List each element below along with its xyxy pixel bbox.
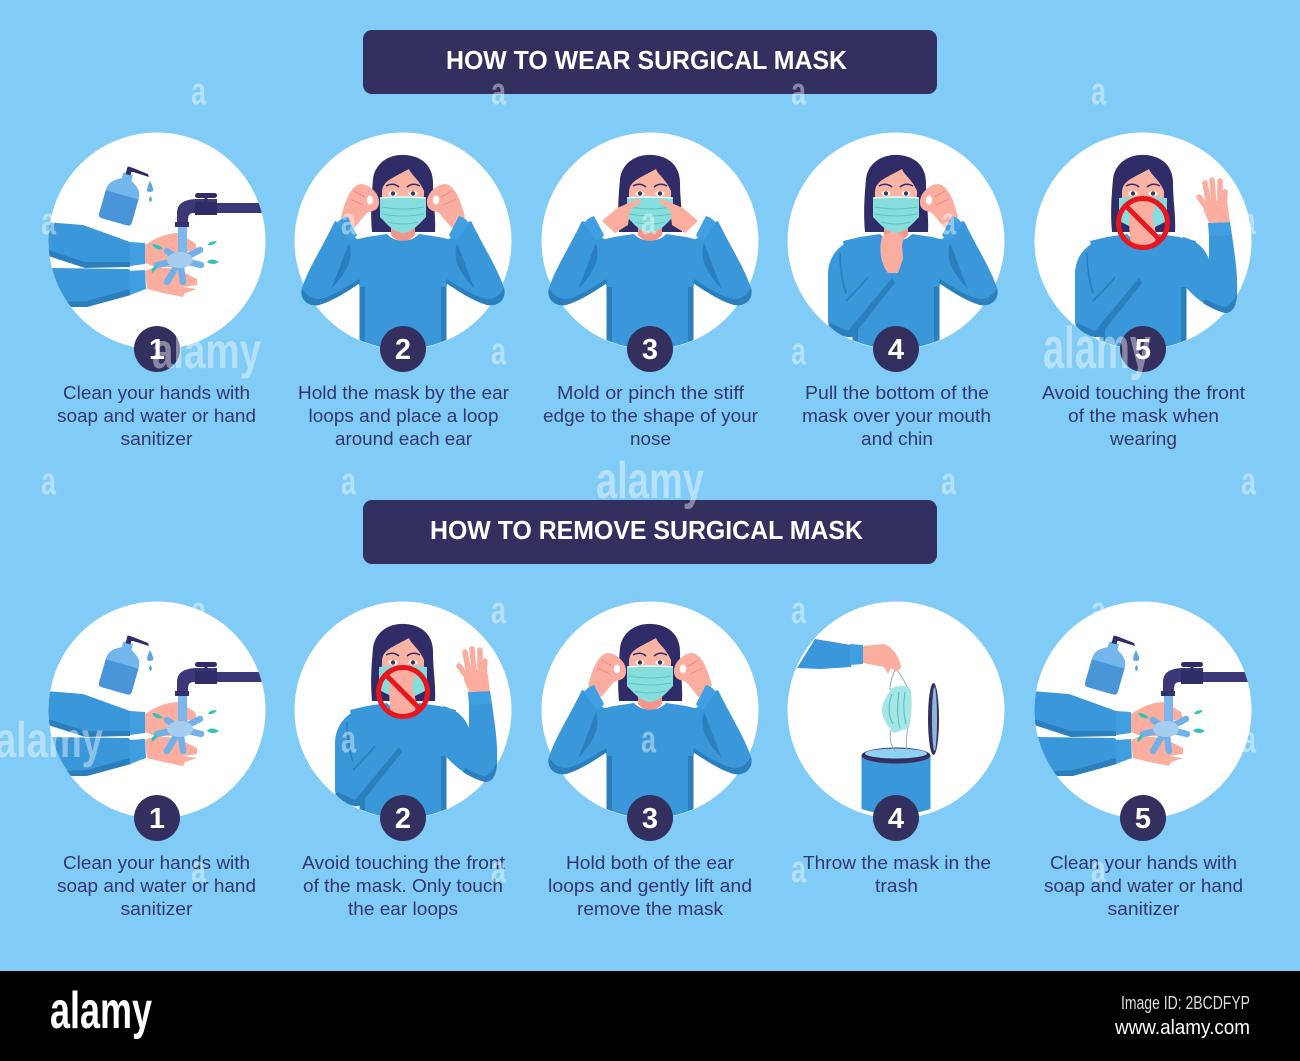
- watermarks: a: [1241, 461, 1257, 503]
- captions row 1: Hold the mask by the ear: [298, 383, 509, 403]
- captions row 1: Clean your hands with: [63, 383, 250, 403]
- watermarks: a: [941, 201, 957, 243]
- heading: how to wear: [363, 30, 937, 94]
- captions row 2: Clean your hands with: [1050, 853, 1237, 873]
- step 4 wear: pull mask: [788, 132, 1004, 350]
- watermarks: a: [491, 331, 507, 373]
- watermarks: a: [341, 201, 357, 243]
- captions row 1: wearing: [1109, 429, 1177, 449]
- captions row 1: Avoid touching the front: [1042, 383, 1245, 403]
- captions row 2: sanitizer: [1108, 899, 1180, 919]
- captions row 1: soap and water or hand: [57, 406, 256, 426]
- watermarks: [0, 71, 1257, 891]
- heading: how to remove: [363, 500, 937, 564]
- watermarks: a: [491, 590, 507, 632]
- number badges row 1: 5: [1135, 334, 1151, 366]
- watermarks: a: [1241, 719, 1257, 761]
- watermarks: alamy: [596, 452, 704, 510]
- captions row 1: loops and place a loop: [308, 406, 498, 426]
- captions row 2: trash: [875, 876, 918, 896]
- captions row 1: of the mask when: [1068, 406, 1219, 426]
- step 4 remove: throw in trash: [788, 602, 1004, 818]
- watermarks: a: [641, 201, 657, 243]
- number badges row 2: [134, 795, 1166, 841]
- watermarks: alamy: [1043, 316, 1151, 381]
- footer image id: Image ID: 2BCDFYP: [1121, 993, 1250, 1013]
- captions row 2: the ear loops: [348, 899, 458, 919]
- number badges row 1: 1: [149, 334, 165, 366]
- watermarks: a: [191, 71, 207, 113]
- captions row 1: edge to the shape of your: [543, 406, 758, 426]
- footer bar: [0, 971, 1300, 1061]
- watermarks: a: [941, 461, 957, 503]
- step 1 remove: wash hands: [45, 602, 266, 818]
- watermarks: a: [791, 849, 807, 891]
- watermarks: a: [491, 849, 507, 891]
- watermarks: a: [1241, 201, 1257, 243]
- watermarks: a: [791, 71, 807, 113]
- step 1 wear: wash hands: [45, 132, 266, 350]
- watermarks: a: [491, 71, 507, 113]
- step 2 remove: do not touch: [294, 602, 512, 818]
- number badges row 2: 3: [642, 803, 658, 835]
- number badges row 2: 2: [395, 803, 411, 835]
- captions row 2: remove the mask: [577, 899, 724, 919]
- captions row 2: soap and water or hand: [57, 876, 256, 896]
- step 2 wear: place loops: [294, 132, 512, 350]
- captions row 2: soap and water or hand: [1044, 876, 1243, 896]
- watermarks: a: [791, 590, 807, 632]
- number badges row 1: 4: [888, 334, 904, 366]
- captions row 1: Mold or pinch the stiff: [557, 383, 745, 403]
- captions row 1: and chin: [861, 429, 933, 449]
- watermarks: a: [641, 719, 657, 761]
- step 5 wear: do not touch: [1034, 132, 1252, 350]
- arm and hand: [797, 639, 901, 674]
- captions row 1: mask over your mouth: [802, 406, 991, 426]
- footer logo: alamy: [50, 982, 152, 1040]
- captions row 1: around each ear: [335, 429, 472, 449]
- watermarks: alamy: [152, 323, 261, 379]
- captions row 1: [57, 383, 1245, 449]
- number badges row 2: 5: [1135, 803, 1151, 835]
- watermarks: a: [41, 461, 57, 503]
- step 3 wear: pinch nose: [542, 132, 758, 350]
- number badges row 1: 3: [642, 334, 658, 366]
- captions row 1: sanitizer: [120, 429, 192, 449]
- captions row 2: Avoid touching the front: [302, 853, 505, 873]
- heading: how to wear: HOW TO WEAR SURGICAL MASK: [446, 45, 847, 75]
- captions row 2: of the mask. Only touch: [303, 876, 503, 896]
- watermarks: a: [1091, 71, 1107, 113]
- watermarks: a: [341, 719, 357, 761]
- captions row 2: loops and gently lift and: [548, 876, 752, 896]
- step 3 remove: lift loops: [542, 602, 758, 818]
- number badges row 2: 4: [888, 803, 904, 835]
- captions row 2: Throw the mask in the: [803, 853, 991, 873]
- captions row 2: Hold both of the ear: [566, 853, 734, 873]
- captions row 2: [57, 853, 1243, 919]
- captions row 2: Clean your hands with: [63, 853, 250, 873]
- step 5 remove: wash hands: [1031, 602, 1252, 818]
- captions row 2: sanitizer: [120, 899, 192, 919]
- number badges row 1: [134, 326, 1166, 372]
- watermarks: a: [191, 849, 207, 891]
- watermarks: a: [1091, 849, 1107, 891]
- heading: how to remove: HOW TO REMOVE SURGICAL MASK: [430, 515, 863, 545]
- watermarks: a: [941, 719, 957, 761]
- number badges row 2: 1: [149, 803, 165, 835]
- watermarks: a: [341, 461, 357, 503]
- number badges row 1: 2: [395, 334, 411, 366]
- hanging mask: [882, 668, 912, 752]
- watermarks: a: [191, 590, 207, 632]
- footer url: www.alamy.com: [1114, 1017, 1250, 1039]
- trash bin: [862, 683, 939, 815]
- captions row 1: Pull the bottom of the: [805, 383, 989, 403]
- captions row 1: nose: [630, 429, 671, 449]
- watermarks: a: [1091, 590, 1107, 632]
- watermarks: a: [41, 201, 57, 243]
- watermarks: a: [791, 331, 807, 373]
